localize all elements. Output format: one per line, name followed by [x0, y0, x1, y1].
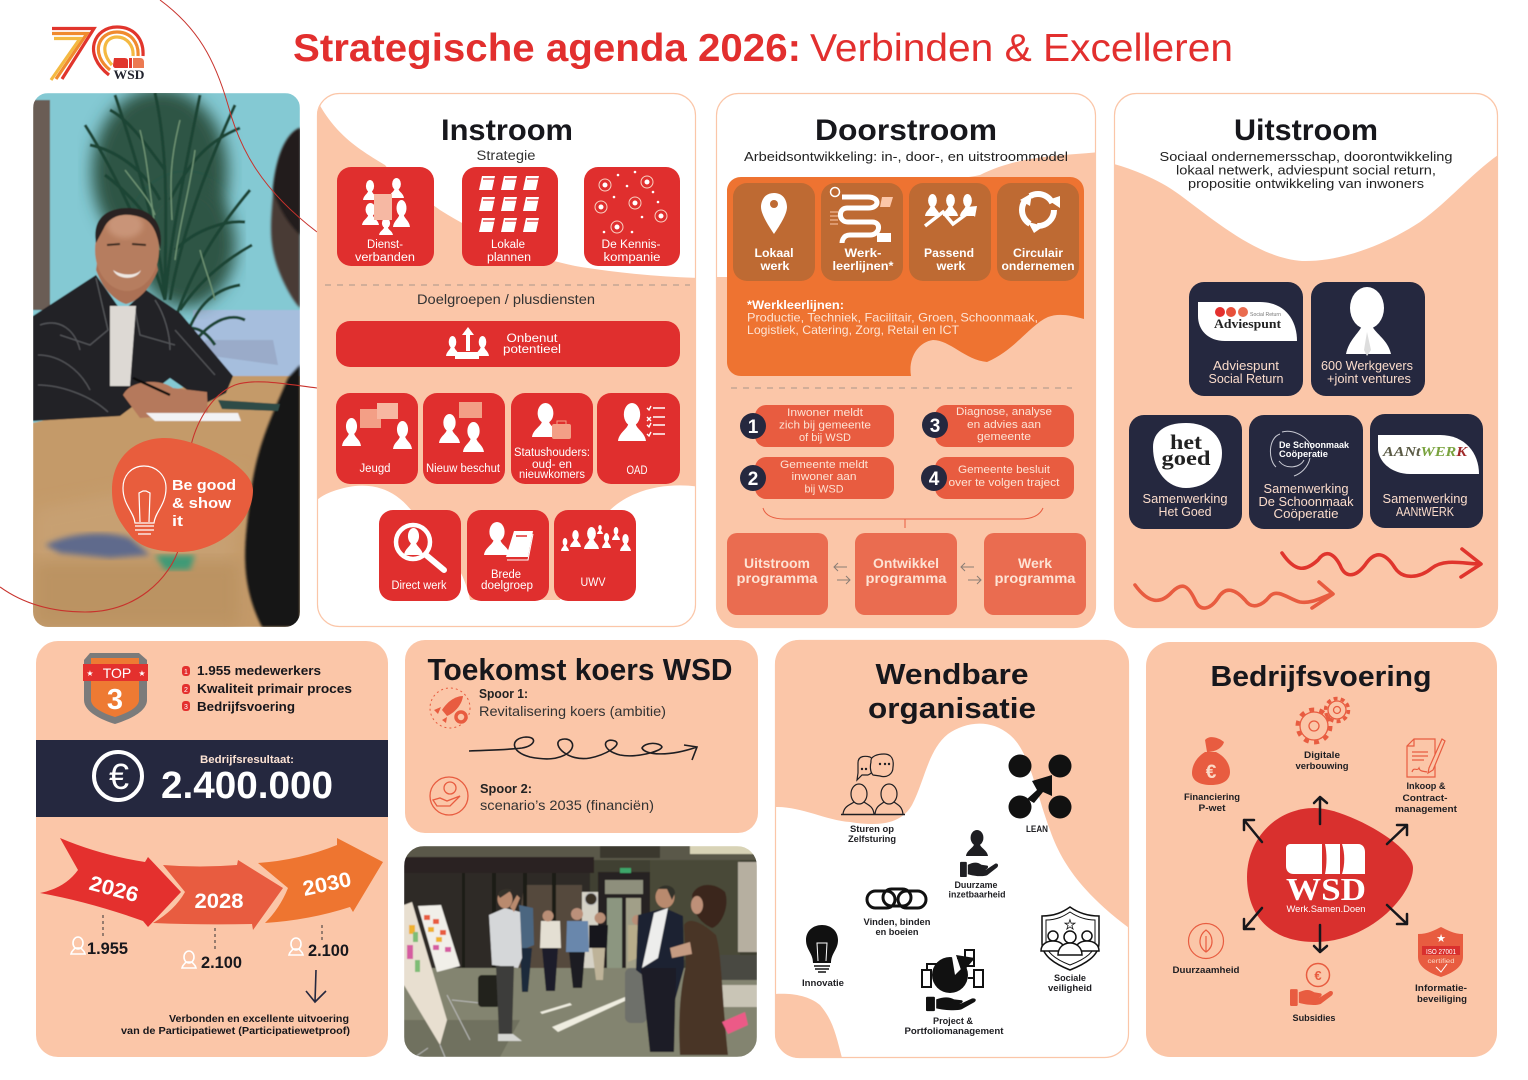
card: Passend werk: werk	[935, 259, 966, 273]
item: Duurzame inzetbaarheid	[948, 830, 1006, 900]
decorative curve top	[160, 0, 317, 232]
caption	[121, 1013, 350, 1037]
box: Werk programma	[984, 533, 1086, 615]
icon: rocket and gear	[430, 688, 470, 728]
box: Uitstroom programma: Uitstroom	[744, 555, 810, 571]
badge: top 3: ★	[138, 669, 146, 678]
list: top 3	[182, 663, 352, 714]
arrow: 2028: 2028	[194, 890, 244, 913]
bar: Onbenut potentieel: Onbenut	[506, 333, 558, 345]
badge: top 3: ★	[86, 669, 94, 678]
card: Nieuw beschut	[423, 393, 505, 484]
intro text: lokaal netwerk, adviespunt social return,	[1176, 162, 1436, 178]
step 1	[740, 405, 894, 447]
item: LEAN	[1008, 754, 1072, 834]
step 4: 4	[929, 469, 940, 490]
arrows from WSD	[1244, 797, 1407, 952]
WSD blob: WSD	[1286, 871, 1366, 907]
card: Brede doelgroep	[467, 510, 549, 601]
card: Lokale plannen: plannen	[487, 252, 531, 264]
title: Verbinden & Excelleren	[810, 27, 1233, 70]
card: Lokale plannen	[462, 167, 558, 266]
item: Subsidies	[1290, 964, 1336, 1023]
subheading: Strategie	[476, 148, 536, 163]
count: 2030	[289, 925, 349, 960]
item: Duurzaamheid	[1172, 924, 1240, 975]
item: Sociale veiligheid	[1041, 907, 1099, 993]
card: UWV: UWV	[580, 577, 606, 589]
item: Vinden, binden en boeien: Vinden, binden	[864, 917, 930, 927]
item: Inkoop & Contractmanagement	[1395, 739, 1457, 814]
band: Bedrijfsresultaat: €	[109, 756, 129, 797]
card: Het Goed: het	[1170, 430, 1202, 454]
note: Werkleerlijnen: Productie, Techniek, Facilitair, Groen, Schoonmaak,	[747, 310, 1038, 324]
heading: Wendbare	[876, 659, 1028, 691]
band: Bedrijfsresultaat: 2.400.000	[161, 765, 333, 807]
item: Sturen op Zelfsturing	[841, 754, 905, 844]
panel: Instroom	[317, 93, 700, 627]
card: Adviespunt: Social Return	[1250, 312, 1281, 318]
card: Het Goed: Samenwerking	[1142, 492, 1228, 506]
track 1 text	[479, 686, 666, 719]
track 1 text: Revitalisering koers (ambitie)	[479, 703, 666, 719]
card: De Schoonmaak Cooperatie: De Schoonmaak	[1279, 440, 1350, 450]
arrow: orange wavy	[1135, 582, 1333, 608]
step 2: Gemeente meldt	[780, 459, 868, 471]
item: Sturen op Zelfsturing: Zelfsturing	[848, 834, 896, 844]
icon: light bulb	[123, 466, 166, 534]
track 2 text: scenario’s 2035 (financiën)	[480, 797, 654, 813]
card: Statushouders	[511, 393, 593, 484]
panel: Uitstroom	[1114, 93, 1498, 628]
WSD blob: Werk.Samen.Doen	[1286, 904, 1366, 914]
step 2: inwoner aan	[792, 471, 856, 483]
item: Duurzame inzetbaarheid: inzetbaarheid	[948, 890, 1006, 900]
track 2 text	[480, 781, 654, 813]
count: 2026	[71, 915, 128, 958]
item: Informatiebeveiliging: ISO 27001	[1426, 949, 1456, 956]
card: Circulair ondernemen: Circulair	[1013, 246, 1063, 260]
item: Financiering P-wet: Financiering	[1184, 792, 1240, 802]
card: Adviespunt	[1189, 282, 1303, 396]
panel: Toekomst koers WSD	[405, 640, 758, 833]
box: Werk programma: Werk	[1018, 555, 1052, 571]
caption: Verbonden en excellente uitvoering	[169, 1013, 349, 1025]
card: OAD	[597, 393, 680, 484]
card: Lokaal werk	[733, 183, 815, 281]
item: Informatiebeveiliging: Informatie-	[1415, 983, 1467, 993]
item: Digitale verbouwing: verbouwing	[1296, 761, 1348, 771]
card: 600 Werkgevers	[1311, 282, 1425, 396]
item: LEAN: LEAN	[1026, 824, 1048, 834]
item: Innovatie: Innovatie	[802, 978, 844, 988]
flipcharts	[404, 902, 447, 1045]
card: De Schoonmaak Cooperatie	[1249, 415, 1363, 529]
step 3	[922, 405, 1074, 447]
item: Sociale veiligheid: Sociale	[1054, 973, 1086, 983]
item: Financiering P-wet	[1184, 737, 1240, 813]
title	[293, 27, 1233, 70]
card: Direct werk: Direct werk	[392, 580, 447, 592]
card: Passend werk	[909, 183, 991, 281]
item: Project & Portfoliomanagement	[904, 950, 1004, 1036]
item: Innovatie	[802, 925, 844, 988]
plant foliage	[85, 88, 252, 350]
step 3: gemeente	[977, 431, 1031, 443]
label: Doelgroepen / plusdiensten: Doelgroepen / plusdiensten	[417, 292, 595, 307]
subheading: Arbeidsontwikkeling: in-, door-, en uitstroommodel	[744, 149, 1068, 164]
arrow: 2030: 2030	[301, 868, 353, 901]
bar: Onbenut potentieel: potentieel	[503, 344, 561, 356]
arrow: 2030	[258, 838, 383, 923]
card: Jeugd	[336, 393, 418, 484]
box: Uitstroom programma: programma	[736, 570, 818, 586]
card: 600 Werkgevers: +joint ventures	[1327, 372, 1411, 386]
step 4: over te volgen traject	[948, 477, 1060, 489]
card: AANtWERK: AANtWERK	[1396, 505, 1455, 519]
count: 2030: 2.100	[308, 942, 349, 960]
note: Werkleerlijnen: Logistiek, Catering, Zorg, Retail en ICT	[747, 323, 960, 337]
card: Circulair ondernemen: ondernemen	[1002, 259, 1074, 273]
card: Het Goed	[1129, 415, 1242, 529]
step 2	[740, 457, 894, 499]
box: Werk programma: programma	[994, 570, 1076, 586]
item: Digitale verbouwing	[1296, 698, 1348, 771]
note: Werkleerlijnen: *Werkleerlijnen:	[747, 298, 844, 312]
item: Digitale verbouwing: Digitale	[1304, 750, 1340, 760]
item: Sociale veiligheid: ★	[1064, 917, 1076, 932]
card: AANtWERK	[1370, 414, 1483, 528]
item: Financiering P-wet: €	[1206, 762, 1217, 783]
item: Duurzaamheid: Duurzaamheid	[1172, 965, 1240, 975]
band: Bedrijfsresultaat: Bedrijfsresultaat:	[200, 754, 294, 766]
card: De Kenniskompanie: kompanie	[604, 252, 660, 264]
icon: hand and coin cycle	[430, 777, 468, 815]
item: Financiering P-wet: P-wet	[1198, 803, 1226, 813]
item: Subsidies: Subsidies	[1292, 1013, 1336, 1023]
card: Het Goed: goed	[1162, 446, 1211, 470]
step 1: zich bij gemeente	[779, 420, 871, 432]
title: Strategische agenda 2026:	[293, 27, 801, 70]
item: Inkoop & Contractmanagement: Contract-	[1402, 793, 1448, 803]
laughing man and woman	[636, 885, 748, 1055]
step 1: Inwoner meldt	[787, 407, 863, 419]
photo: man at table	[33, 88, 300, 627]
jacket	[33, 275, 233, 421]
panel: Bedrijfsvoering	[1146, 642, 1497, 1057]
heading: Doorstroom	[815, 114, 997, 147]
photo: workshop group	[404, 846, 757, 1057]
item: Informatiebeveiliging	[1415, 927, 1467, 1004]
bracket	[763, 508, 1043, 528]
item: Vinden, binden en boeien: en boeien	[876, 927, 918, 937]
arrow: 2028	[153, 860, 283, 930]
item: Sociale veiligheid: veiligheid	[1048, 983, 1092, 993]
heading: Uitstroom	[1234, 114, 1378, 147]
card: Nieuw beschut: Nieuw beschut	[426, 463, 501, 475]
card: Dienstverbanden	[337, 167, 434, 266]
card: Werkleerlijnen: leerlijnen*	[832, 259, 894, 273]
item: Inkoop & Contractmanagement: Inkoop &	[1406, 781, 1446, 791]
card: Passend werk: Passend	[924, 246, 974, 260]
bar: Onbenut potentieel	[336, 321, 680, 367]
list: top 3: 3	[184, 704, 188, 711]
card: UWV	[554, 510, 636, 601]
card: Adviespunt: Social Return	[1208, 372, 1284, 386]
item: Project & Portfoliomanagement: Project &	[933, 1016, 974, 1026]
track 2 text: Spoor 2:	[480, 781, 532, 796]
logo: 70 years WSD: WSD	[114, 68, 144, 82]
list: top 3: 1.955 medewerkers	[197, 663, 321, 678]
card: De Schoonmaak Cooperatie: Coöperatie	[1279, 449, 1328, 459]
card: AANtWERK: Samenwerking	[1382, 492, 1468, 506]
item: Inkoop & Contractmanagement: management	[1395, 804, 1457, 814]
card: De Schoonmaak Cooperatie: Samenwerking	[1264, 482, 1349, 496]
man in light shirt	[489, 889, 522, 1041]
heading: Instroom	[441, 114, 573, 147]
count: 2026: 1.955	[87, 940, 128, 958]
item: Informatiebeveiliging: ★	[1436, 933, 1446, 945]
callout: Be good & show it: it	[172, 513, 183, 530]
intro text: Sociaal ondernemersschap, doorontwikkeling	[1160, 149, 1452, 164]
item: Project & Portfoliomanagement: Portfoliomanagement	[904, 1026, 1004, 1036]
arrow: 2026: 2026	[87, 872, 141, 907]
card: De Kenniskompanie: De Kennis-	[602, 239, 661, 251]
table	[33, 376, 300, 627]
WSD blob	[1247, 808, 1413, 942]
panel: KPI and growth	[36, 641, 388, 1057]
box: Uitstroom programma	[727, 533, 828, 615]
step 4	[921, 457, 1074, 499]
card: Werkleerlijnen: Werk-	[844, 246, 882, 260]
callout: Be good & show it: Be good	[172, 477, 236, 494]
list: top 3: 1	[184, 669, 188, 676]
card: Jeugd: Jeugd	[360, 463, 390, 475]
card: De Schoonmaak Cooperatie: Coöperatie	[1274, 507, 1339, 521]
step 1: 1	[748, 417, 759, 438]
card: 600 Werkgevers: 600 Werkgevers	[1321, 359, 1413, 373]
track 1 text: Spoor 1:	[479, 686, 528, 701]
note: Werkleerlijnen	[747, 298, 1038, 337]
intro text	[1160, 149, 1452, 191]
heading: Toekomst koers WSD	[428, 652, 732, 687]
callout: Be good & show it: & show	[172, 495, 231, 512]
heading: Bedrijfsvoering	[1210, 661, 1432, 693]
card: Circulair ondernemen	[997, 183, 1079, 281]
step 4: Gemeente besluit	[958, 464, 1050, 476]
callout: Be good & show it	[112, 438, 253, 552]
card: De Kenniskompanie	[584, 167, 680, 266]
item: Duurzame inzetbaarheid: Duurzame	[954, 880, 998, 890]
arrow: squiggle	[469, 737, 697, 760]
background group	[519, 905, 642, 992]
step 3: en advies aan	[967, 419, 1041, 431]
arrow: down	[306, 970, 326, 1002]
step 2: bij WSD	[804, 484, 844, 496]
floor	[404, 968, 757, 1057]
step 3: 3	[930, 416, 940, 437]
item: Sturen op Zelfsturing: Sturen op	[850, 824, 895, 834]
card: Adviespunt: Adviespunt	[1213, 359, 1280, 373]
item: Informatiebeveiliging: certified	[1428, 958, 1455, 965]
card: Dienstverbanden: Dienst-	[367, 239, 403, 251]
item: Informatiebeveiliging: beveiliging	[1417, 994, 1467, 1004]
step 1: of bij WSD	[799, 432, 851, 444]
card: Statushouders: Statushouders:	[514, 447, 590, 459]
card: Adviespunt: Adviespunt	[1214, 316, 1282, 331]
arrows between programmes	[834, 563, 981, 584]
logo: 70 years WSD	[51, 27, 144, 82]
card: OAD: OAD	[626, 465, 648, 477]
card: Direct werk	[379, 510, 461, 601]
man's conversation partner head	[271, 128, 300, 308]
card: Brede doelgroep: doelgroep	[481, 580, 533, 592]
intro text: propositie ontwikkeling van inwoners	[1188, 176, 1425, 191]
band: Bedrijfsresultaat	[36, 740, 388, 817]
count: 2028: 2.100	[201, 954, 242, 972]
box: Ontwikkel programma	[855, 533, 957, 615]
orange block	[727, 177, 1084, 376]
step 3: Diagnose, analyse	[956, 406, 1052, 418]
card: Statushouders: nieuwkomers	[519, 469, 585, 481]
list: top 3: Bedrijfsvoering	[197, 699, 295, 714]
list: top 3: 2	[184, 687, 188, 694]
card: Lokaal werk: Lokaal	[754, 246, 794, 260]
heading: organisatie	[868, 693, 1036, 725]
card: Lokale plannen: Lokale	[491, 239, 525, 251]
card: AANtWERK: AANt WER K	[1382, 445, 1469, 460]
panel: Doorstroom	[716, 93, 1100, 630]
card: Het Goed: Het Goed	[1158, 505, 1212, 519]
card: Dienstverbanden: verbanden	[355, 252, 415, 264]
badge: top 3	[83, 653, 148, 724]
list: top 3: Kwaliteit primair proces	[197, 681, 352, 696]
step 2: 2	[748, 469, 758, 490]
badge: top 3: 3	[107, 684, 123, 716]
card: Lokaal werk: werk	[759, 259, 790, 273]
arrow: red wavy	[1282, 549, 1481, 577]
card: De Schoonmaak Cooperatie: De Schoonmaak	[1258, 495, 1354, 509]
card: Werkleerlijnen	[821, 183, 903, 281]
heading	[868, 659, 1036, 725]
arrow: 2026	[40, 838, 181, 927]
badge: top 3: TOP	[103, 665, 131, 681]
panel: Wendbare organisatie	[775, 640, 1129, 1058]
decorative curve bottom	[0, 382, 317, 612]
item: Subsidies: €	[1314, 968, 1322, 983]
box: Ontwikkel programma: Ontwikkel	[873, 555, 939, 571]
box: Ontwikkel programma: programma	[866, 570, 947, 586]
caption: van de Participatiewet (Participatiewetproof)	[121, 1025, 350, 1037]
count: 2028	[182, 928, 242, 972]
card: Brede doelgroep: Brede	[491, 569, 521, 581]
item: Vinden, binden en boeien	[864, 889, 930, 937]
card: Statushouders: oud- en	[532, 459, 572, 471]
